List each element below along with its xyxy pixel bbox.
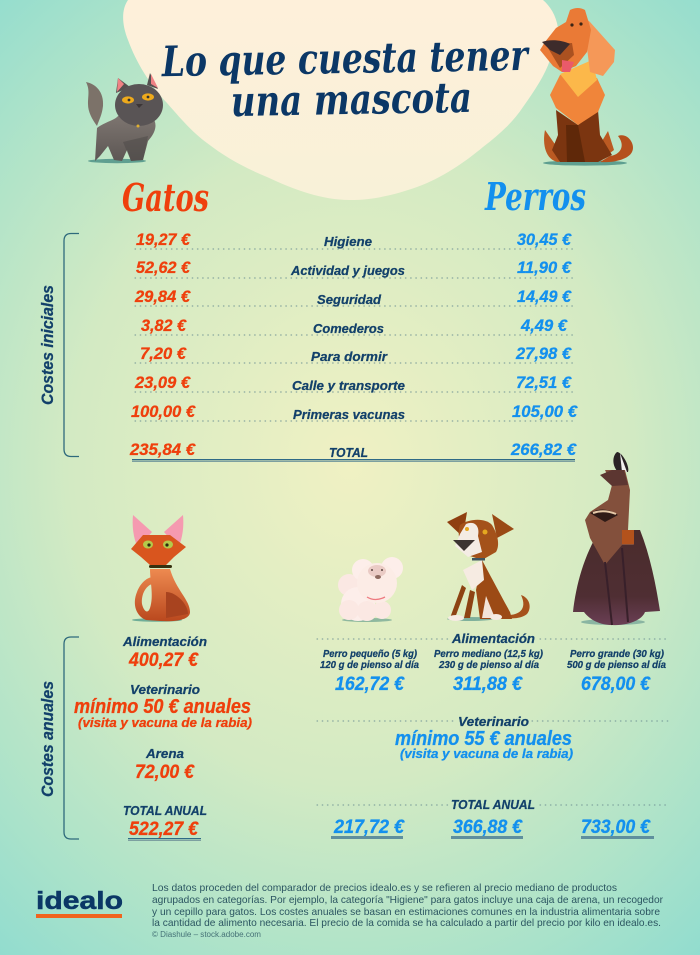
Veterinario dogs [317, 714, 668, 761]
heading: Gatos: Gatos [122, 175, 209, 220]
row: Higiene: Higiene [324, 234, 372, 249]
row: Comederos: Comederos [313, 321, 384, 336]
row: Actividad y juegos: 11,90 € [517, 258, 572, 277]
Total anual dogs [317, 797, 668, 839]
table: initial costs [129, 230, 579, 462]
panel: annual costs cats [74, 634, 252, 841]
Alimentación cats: 400,27 € [128, 650, 199, 671]
row: Primeras vacunas [131, 402, 579, 422]
row: TOTAL: 266,82 € [510, 440, 578, 459]
cream title blob [123, 0, 559, 200]
illustration: orange dog with bandana [540, 8, 633, 166]
row: Higiene: 30,45 € [517, 230, 572, 249]
medium dog food: 230 g de pienso al día [438, 660, 539, 671]
footnote text: Los datos proceden del comparador de precios idealo.es y se refieren al precio mediano de productos [152, 882, 617, 894]
row: Comederos: 3,82 € [141, 316, 187, 335]
Arena cats: Arena [145, 746, 184, 761]
large dog food: 500 g de pienso al día [567, 660, 666, 671]
row: TOTAL: 235,84 € [129, 440, 197, 459]
Veterinario cats: (visita y vacuna de la rabia) [78, 715, 252, 730]
row: Primeras vacunas: 105,00 € [512, 402, 579, 421]
illustration: medium brown and white dog [447, 512, 530, 621]
illustration: small white dog [338, 557, 403, 622]
row: Actividad y juegos [136, 258, 572, 278]
medium dog food: Perro mediano (12,5 kg) [434, 649, 544, 660]
Veterinario dogs: (visita y vacuna de la rabia) [400, 746, 573, 761]
row: Calle y transporte [134, 373, 572, 393]
small dog food [320, 649, 419, 695]
small dog food: 162,72 € [335, 674, 405, 695]
large dog food: 678,00 € [581, 674, 651, 695]
footnote text: la cantidad de alimento necesaria. El precio de la comida se ha calculado a partir del precio por kilo en idealo.es. [152, 917, 661, 929]
row: Para dormir: 7,20 € [140, 344, 188, 363]
illustration: grey cat [86, 73, 163, 163]
row: Higiene [136, 230, 572, 249]
Veterinario cats [74, 682, 252, 730]
row: Primeras vacunas: 100,00 € [131, 402, 196, 421]
row: Seguridad: 29,84 € [134, 287, 191, 306]
Arena cats: 72,00 € [135, 762, 195, 783]
large dog food: Perro grande (30 kg) [570, 649, 665, 660]
row: Seguridad: Seguridad [317, 292, 382, 307]
heading: Perros: Perros [484, 174, 586, 219]
Alimentación cats: Alimentación [122, 634, 207, 649]
Total anual dogs: 217,72 € [333, 817, 405, 838]
row: Actividad y juegos: Actividad y juegos [290, 263, 405, 278]
large dog food [567, 649, 666, 695]
row: Para dormir: Para dormir [311, 349, 388, 364]
row: Calle y transporte: 23,09 € [134, 373, 191, 392]
row: Para dormir [140, 344, 572, 364]
label: Costes anuales: Costes anuales [39, 681, 57, 797]
row: Calle y transporte: 72,51 € [516, 373, 572, 392]
Total anual cats [123, 803, 207, 841]
label: Costes iniciales: Costes iniciales [39, 285, 57, 405]
title: una mascota [230, 73, 472, 126]
row: Higiene: 19,27 € [136, 230, 191, 249]
footnote text: © Diashule – stock.adobe.com [152, 930, 261, 939]
Total anual dogs: 733,00 € [581, 817, 651, 838]
footnote text: agrupados en categorías. Por ejemplo, la categoría "Higiene" para gatos incluye una caja de arena, un recogedor [152, 894, 663, 906]
row: Seguridad: 14,49 € [517, 287, 572, 306]
logo: idealo: idealo [36, 887, 123, 915]
small dog food: 120 g de pienso al día [320, 660, 419, 671]
Total anual cats: 522,27 € [129, 819, 199, 840]
Total anual dogs: TOTAL ANUAL [451, 797, 535, 812]
illustration: large dark dog [573, 452, 660, 625]
Total anual dogs: 366,88 € [453, 817, 523, 838]
medium dog food [434, 649, 544, 695]
footnote text: y un cepillo para gatos. Los costes anuales se basan en estimaciones comunes en la industria alimentaria sobre [152, 906, 660, 918]
panel: annual costs dogs [317, 631, 668, 839]
title [161, 31, 530, 126]
Arena cats [135, 746, 195, 783]
illustration: orange cat [131, 515, 190, 622]
bracket: costes iniciales [64, 234, 79, 456]
Veterinario cats: Veterinario [130, 682, 200, 697]
row: Actividad y juegos: 52,62 € [136, 258, 191, 277]
Alimentación dogs: Alimentación [451, 631, 535, 646]
row: Primeras vacunas: Primeras vacunas [293, 407, 405, 422]
row: Seguridad [134, 287, 572, 307]
row: Calle y transporte: Calle y transporte [292, 378, 405, 393]
Alimentación cats [122, 634, 207, 671]
medium dog food: 311,88 € [453, 674, 523, 695]
row: Comederos [141, 316, 569, 336]
Veterinario cats: mínimo 50 € anuales [74, 696, 251, 718]
Veterinario dogs: Veterinario [458, 714, 529, 729]
bracket: costes anuales [64, 637, 79, 839]
row: TOTAL: TOTAL [329, 445, 368, 460]
row: Para dormir: 27,98 € [515, 344, 572, 363]
Veterinario dogs: mínimo 55 € anuales [395, 728, 572, 750]
title: Lo que cuesta tener [161, 31, 530, 86]
footnote text [152, 882, 663, 939]
row: Comederos: 4,49 € [520, 316, 569, 335]
Total anual cats: TOTAL ANUAL [123, 803, 207, 818]
row: TOTAL [129, 440, 578, 460]
small dog food: Perro pequeño (5 kg) [323, 649, 418, 660]
